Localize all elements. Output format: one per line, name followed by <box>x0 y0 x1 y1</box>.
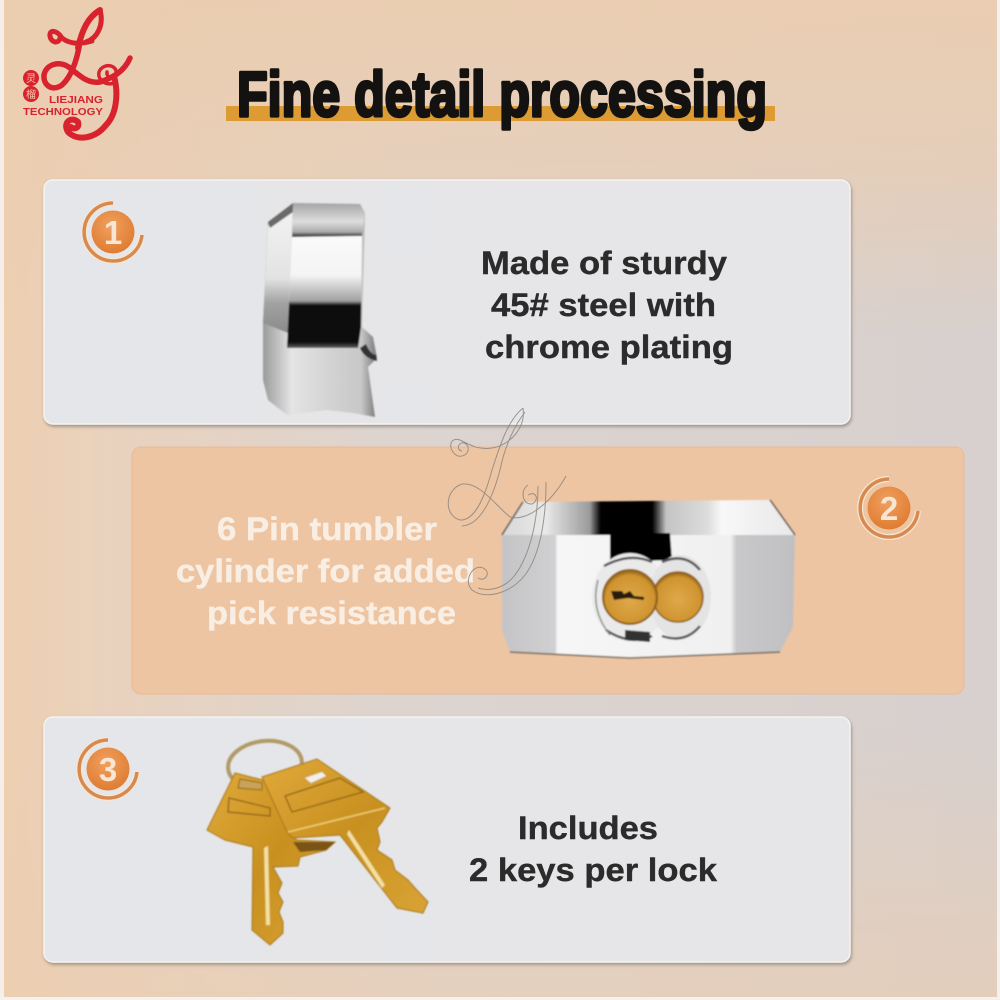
panel text <box>176 511 475 631</box>
panel 2: cylinder <box>132 447 964 694</box>
panel text <box>481 245 733 365</box>
logo monogram LG <box>44 10 130 138</box>
panel text: 6 Pin tumbler <box>217 511 437 547</box>
panel background <box>44 717 850 962</box>
logo seal characters <box>23 70 39 102</box>
key ring <box>226 737 304 793</box>
title <box>226 60 775 130</box>
badge 1 <box>84 203 142 261</box>
panel 1: steel <box>44 180 850 424</box>
logo seal characters: 灵 <box>26 73 36 85</box>
badge 3: 3 <box>99 751 117 788</box>
panel text: pick resistance <box>207 595 456 631</box>
panel text <box>469 810 717 888</box>
lock side view image <box>263 203 377 417</box>
panel 3: keys <box>44 717 850 962</box>
logo <box>23 10 130 138</box>
panel text: Made of sturdy <box>481 245 727 281</box>
front key <box>262 759 428 913</box>
badge 2: 2 <box>880 490 898 527</box>
watermark <box>448 408 566 595</box>
badge 2 <box>860 479 918 537</box>
panel text: chrome plating <box>485 329 733 365</box>
panel text: 45# steel with <box>491 287 716 323</box>
logo wordmark: LIEJIANG <box>49 94 103 106</box>
badge 3 <box>79 740 137 798</box>
panel text: Includes <box>518 810 658 846</box>
panel text: 2 keys per lock <box>469 852 717 888</box>
logo wordmark <box>23 94 103 118</box>
logo wordmark: TECHNOLOGY <box>23 106 103 118</box>
panel background <box>132 447 964 694</box>
logo seal characters: 榴 <box>26 88 36 101</box>
title underline bar <box>226 106 775 121</box>
title text: Fine detail processing <box>237 60 767 130</box>
back key <box>207 773 335 945</box>
panel text: cylinder for added <box>176 553 475 589</box>
badge 1: 1 <box>104 214 122 251</box>
panel background <box>44 180 850 424</box>
keys image <box>207 737 428 945</box>
lock front view image <box>502 500 795 658</box>
